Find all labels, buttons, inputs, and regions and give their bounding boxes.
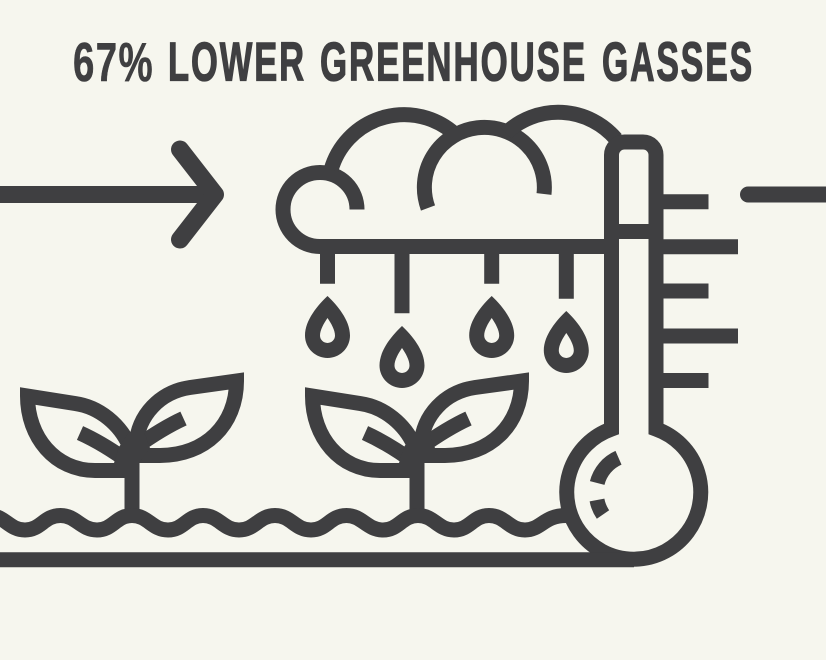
ground line bbox=[0, 552, 634, 567]
icon: sprout right bbox=[312, 381, 522, 512]
arrow: outgoing line stub bbox=[748, 186, 826, 202]
icon: climate illustration bbox=[0, 112, 738, 560]
icon: thermometer bbox=[567, 142, 701, 559]
title: LOWER bbox=[168, 32, 306, 93]
icon: water drops bbox=[305, 296, 589, 388]
icon: soil wave bbox=[0, 516, 566, 530]
arrow: incoming right arrow bbox=[0, 150, 215, 240]
title bbox=[73, 31, 754, 93]
icon: sprout left bbox=[28, 381, 236, 512]
icon: thermometer scale ticks bbox=[660, 202, 738, 380]
icon: cloud bbox=[283, 112, 616, 246]
icon: rain streaks bbox=[328, 250, 566, 313]
title: GREENHOUSE bbox=[320, 32, 587, 93]
title: 67% bbox=[73, 31, 154, 93]
